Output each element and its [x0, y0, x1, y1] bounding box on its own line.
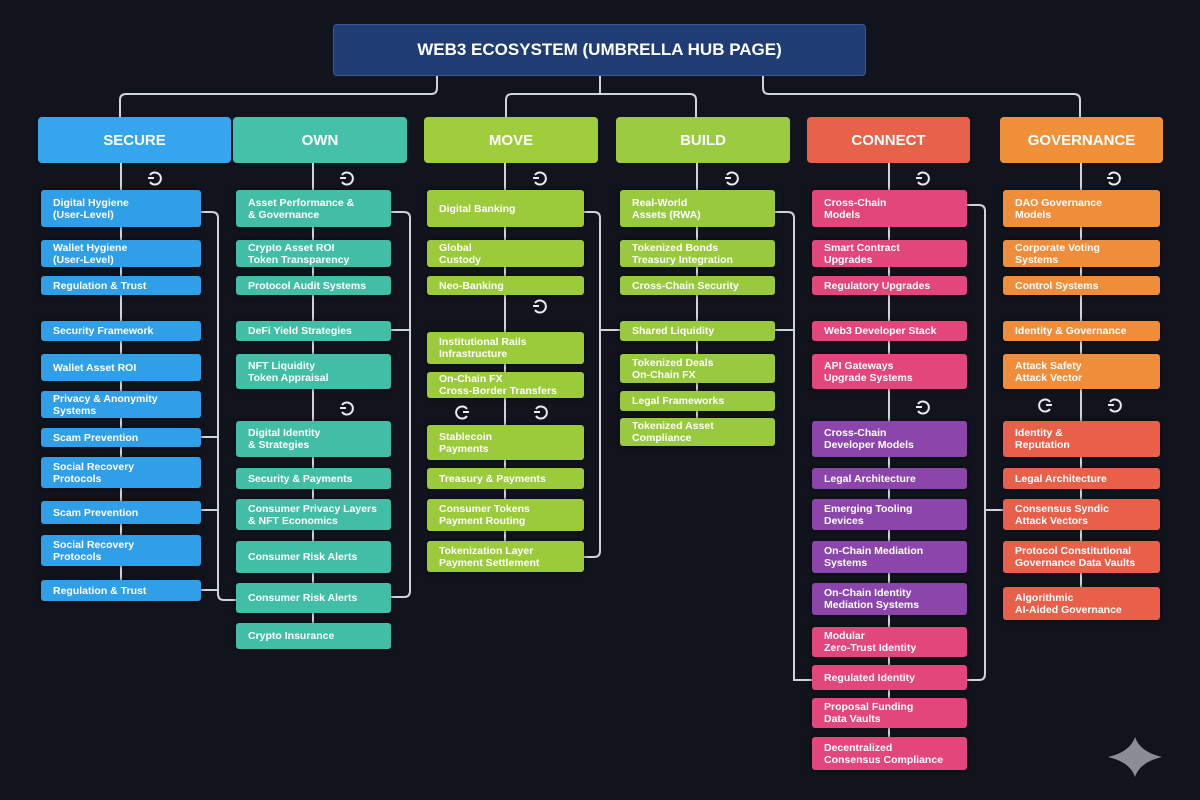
text: Digital Hygiene — [53, 196, 129, 208]
text: Developer Models — [824, 439, 914, 451]
header: SECURE: SECURE — [103, 132, 166, 148]
text: Infrastructure — [439, 348, 507, 360]
text: Custody — [439, 254, 481, 266]
text: On-Chain FX — [632, 368, 696, 380]
text: Payment Routing — [439, 515, 525, 527]
text: Protocols — [53, 550, 101, 562]
text: Tokenized Asset — [632, 420, 714, 432]
text: DeFi Yield Strategies — [248, 325, 352, 337]
text: Corporate Voting — [1015, 242, 1100, 254]
text: Scam Prevention — [53, 432, 138, 444]
column: OWN — [233, 187, 394, 649]
text: NFT Liquidity — [248, 360, 315, 372]
text: Regulation & Trust — [53, 280, 146, 292]
text: Cross-Border Transfers — [439, 385, 557, 397]
text: Protocol Constitutional — [1015, 545, 1131, 557]
text: Security Framework — [53, 325, 153, 337]
text: AI-Aided Governance — [1015, 604, 1122, 616]
text: On-Chain Identity — [824, 587, 912, 599]
text: DAO Governance — [1015, 196, 1102, 208]
text: Digital Identity — [248, 427, 320, 439]
text: Cross-Chain — [824, 196, 886, 208]
text: Wallet Asset ROI — [53, 362, 136, 374]
text: Payment Settlement — [439, 556, 539, 568]
text: Algorithmic — [1015, 592, 1073, 604]
text: Neo-Banking — [439, 280, 504, 292]
text: Zero-Trust Identity — [824, 642, 916, 654]
text: Crypto Insurance — [248, 630, 334, 642]
text: Token Appraisal — [248, 372, 329, 384]
text: Reputation — [1015, 439, 1070, 451]
text: & Governance — [248, 208, 319, 220]
text: (User-Level) — [53, 208, 114, 220]
text: Regulation & Trust — [53, 584, 146, 596]
text: Compliance — [632, 432, 692, 444]
text: Shared Liquidity — [632, 325, 714, 337]
text: Control Systems — [1015, 280, 1098, 292]
text: Payments — [439, 442, 489, 454]
text: Mediation Systems — [824, 599, 919, 611]
text: On-Chain Mediation — [824, 545, 923, 557]
text: Attack Vectors — [1015, 514, 1088, 526]
text: Institutional Rails — [439, 336, 527, 348]
text: Security & Payments — [248, 472, 352, 484]
text: Wallet Hygiene — [53, 242, 127, 254]
header: OWN: OWN — [302, 132, 338, 148]
text: Digital Banking — [439, 202, 515, 214]
header: OWN — [233, 117, 407, 163]
text: API Gateways — [824, 360, 893, 372]
text: Web3 Developer Stack — [824, 325, 936, 337]
text: Identity & Governance — [1015, 325, 1126, 337]
text: Cross-Chain Security — [632, 280, 739, 292]
text: Social Recovery — [53, 538, 134, 550]
header: CONNECT — [807, 117, 970, 163]
text: Consumer Risk Alerts — [248, 551, 357, 563]
text: Systems — [1015, 254, 1058, 266]
text: Real-World — [632, 196, 687, 208]
text: Decentralized — [824, 742, 892, 754]
text: Legal Frameworks — [632, 395, 724, 407]
text: Consumer Risk Alerts — [248, 592, 357, 604]
column: BUILD — [617, 187, 778, 446]
header: BUILD — [616, 117, 790, 163]
text: Asset Performance & — [248, 196, 354, 208]
text: Treasury Integration — [632, 254, 733, 266]
text: Consumer Privacy Layers — [248, 502, 377, 514]
header: MOVE: MOVE — [489, 132, 533, 148]
text: Protocol Audit Systems — [248, 280, 366, 292]
text: Devices — [824, 514, 864, 526]
text: Tokenization Layer — [439, 544, 533, 556]
text: Systems — [53, 404, 96, 416]
column: SECURE — [41, 187, 204, 601]
text: Tokenized Deals — [632, 356, 714, 368]
text: Consumer Tokens — [439, 503, 530, 515]
text: Emerging Tooling — [824, 502, 912, 514]
text: Attack Vector — [1015, 372, 1082, 384]
text: Attack Safety — [1015, 360, 1082, 372]
text: Tokenized Bonds — [632, 242, 718, 254]
text: Regulated Identity — [824, 672, 915, 684]
text: Upgrade Systems — [824, 372, 913, 384]
header: SECURE — [38, 117, 231, 163]
column: GOVERNANCE — [1000, 187, 1160, 620]
title — [333, 24, 866, 76]
text: Cross-Chain — [824, 427, 886, 439]
column: MOVE — [427, 187, 587, 572]
text: Models — [1015, 208, 1051, 220]
text: & Strategies — [248, 439, 309, 451]
text: Token Transparency — [248, 254, 349, 266]
text: Systems — [824, 557, 867, 569]
text: Data Vaults — [824, 713, 881, 725]
text: Models — [824, 208, 860, 220]
text: Legal Architecture — [824, 472, 916, 484]
column: CONNECT — [809, 187, 970, 770]
text: On-Chain FX — [439, 373, 503, 385]
text: & NFT Economics — [248, 514, 338, 526]
text: (User-Level) — [53, 254, 114, 266]
header: GOVERNANCE — [1000, 117, 1163, 163]
text: Consensus Syndic — [1015, 502, 1109, 514]
text: Assets (RWA) — [632, 208, 701, 220]
text: Global — [439, 242, 472, 254]
header: BUILD: BUILD — [680, 132, 726, 148]
text: Scam Prevention — [53, 506, 138, 518]
header: GOVERNANCE: GOVERNANCE — [1028, 132, 1135, 148]
text: Modular — [824, 630, 865, 642]
header: CONNECT: CONNECT — [851, 132, 926, 148]
text: Regulatory Upgrades — [824, 280, 930, 292]
title: WEB3 ECOSYSTEM (UMBRELLA HUB PAGE) — [417, 40, 782, 59]
text: Governance Data Vaults — [1015, 557, 1135, 569]
text: Consensus Compliance — [824, 754, 943, 766]
text: Stablecoin — [439, 430, 492, 442]
text: Privacy & Anonymity — [53, 392, 158, 404]
text: Smart Contract — [824, 242, 900, 254]
header: MOVE — [424, 117, 598, 163]
text: Proposal Funding — [824, 701, 913, 713]
text: Identity & — [1015, 427, 1063, 439]
text: Crypto Asset ROI — [248, 242, 335, 254]
text: Legal Architecture — [1015, 472, 1107, 484]
text: Upgrades — [824, 254, 872, 266]
text: Treasury & Payments — [439, 472, 546, 484]
text: Protocols — [53, 472, 101, 484]
text: Social Recovery — [53, 460, 134, 472]
